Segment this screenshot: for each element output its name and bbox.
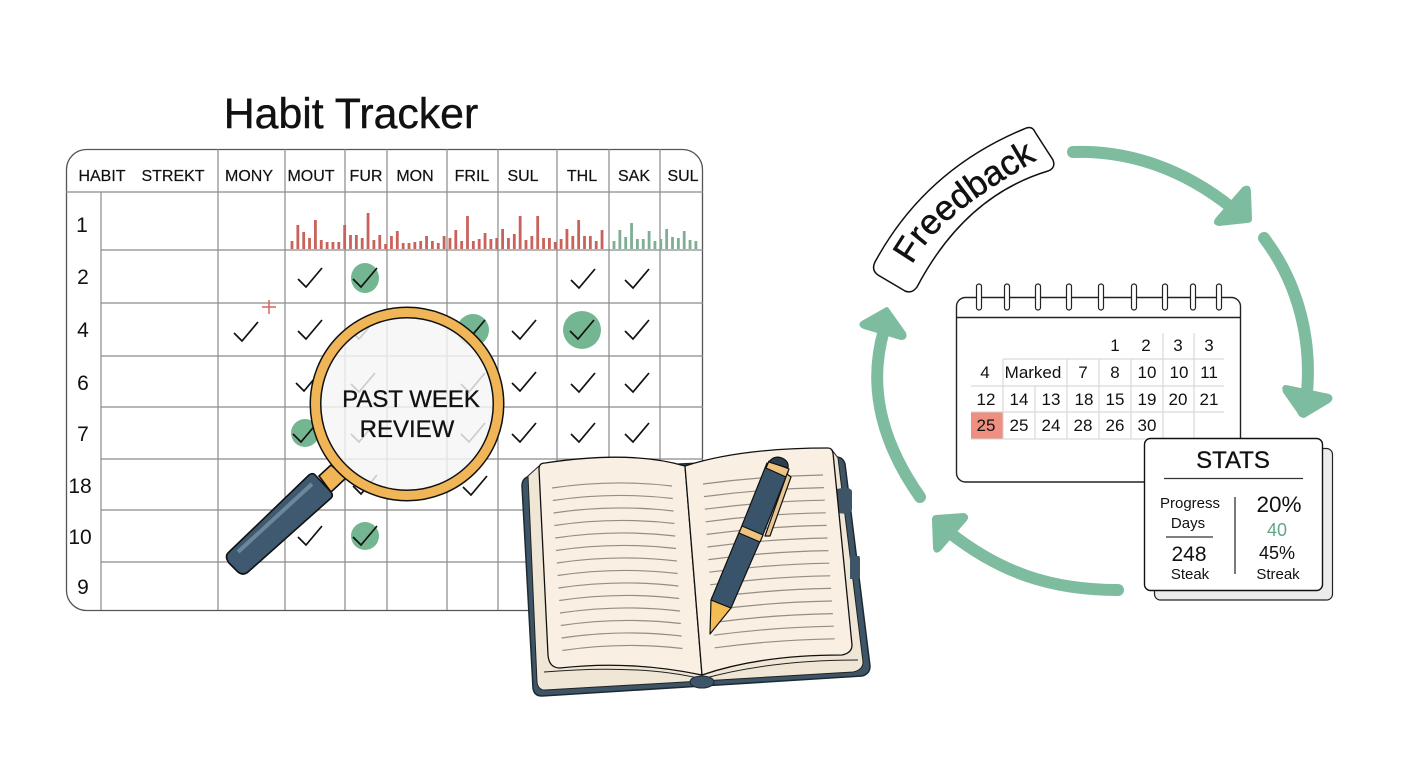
calendar dates: 3 [1173, 336, 1183, 355]
row numbers [68, 214, 92, 599]
calendar dates: 11 [1200, 363, 1218, 382]
front sheet [1144, 438, 1322, 590]
calendar dates: 8 [1110, 363, 1120, 382]
arrow: feedback loop right [1264, 238, 1332, 417]
calendar dates: 4 [980, 363, 990, 382]
column headers: THL [567, 168, 597, 185]
column headers: STREKT [141, 168, 205, 185]
calendar dates: 18 [1075, 390, 1093, 409]
page stack [528, 450, 863, 690]
row numbers: 6 [77, 372, 89, 395]
magnifier neck [319, 465, 346, 492]
calendar dates: 14 [1010, 390, 1028, 409]
right page [685, 448, 852, 675]
calendar dates: 20 [1169, 390, 1187, 409]
cover tabs [837, 488, 852, 514]
column headers: SUL [667, 168, 699, 185]
calendar dates: 10 [1138, 363, 1156, 382]
calendar dates: 28 [1074, 416, 1092, 435]
column headers: SAK [618, 168, 650, 185]
right page lines [703, 475, 835, 648]
calendar dates: 24 [1042, 416, 1060, 435]
panel: stats card [1144, 438, 1332, 600]
calendar dates: 3 [1204, 336, 1214, 355]
binder rings [976, 284, 1222, 310]
right stats column: 40 [1267, 520, 1287, 540]
calendar dates: 13 [1042, 390, 1060, 409]
pen [710, 457, 791, 634]
calendar dates: 26 [1106, 416, 1124, 435]
calendar dates: 21 [1200, 390, 1218, 409]
panel: habit table [66, 149, 703, 610]
table grid [66, 149, 703, 610]
calendar dates: 19 [1138, 390, 1156, 409]
title: Habit Tracker [224, 90, 478, 138]
red plus mark [262, 300, 276, 314]
notebook cover [522, 457, 870, 696]
calendar dates: 10 [1170, 363, 1188, 382]
lens rim [316, 312, 498, 496]
row numbers: 18 [68, 475, 92, 498]
calendar dates: Marked [1005, 363, 1061, 382]
calendar body [956, 298, 1240, 482]
calendar grid [971, 333, 1224, 439]
lens label: PAST WEEK [342, 386, 480, 413]
icon: magnifying glass [226, 312, 498, 574]
calendar dates: 25 [1010, 416, 1028, 435]
right stats column: Streak [1256, 566, 1300, 583]
column headers [78, 168, 699, 185]
callout: Freedback banner [872, 126, 1055, 293]
calendar dates: 12 [977, 390, 995, 409]
row numbers: 1 [76, 214, 88, 237]
stats dividers [1164, 478, 1303, 574]
left stats column: Days [1171, 515, 1205, 532]
left page [539, 457, 702, 675]
stats heading: STATS [1196, 447, 1270, 474]
column headers: MONY [225, 168, 273, 185]
row numbers: 10 [68, 526, 92, 549]
arrow: feedback loop top right [1073, 152, 1251, 225]
left page lines [552, 483, 682, 650]
magnifier handle [226, 474, 332, 574]
row numbers: 4 [77, 319, 89, 342]
row numbers: 9 [77, 576, 89, 599]
lens [317, 314, 497, 494]
calendar dates [977, 336, 1218, 435]
green completed circles [291, 263, 601, 550]
lens label: REVIEW [360, 416, 455, 443]
arrow: feedback loop left [860, 308, 920, 497]
column headers: HABIT [78, 168, 126, 185]
column headers: MOUT [287, 168, 335, 185]
calendar dates: 25 [977, 416, 995, 435]
row numbers: 2 [77, 266, 89, 289]
column headers: MON [396, 168, 434, 185]
icon: open notebook [522, 448, 870, 696]
table frame [66, 150, 702, 610]
right stats column: 45% [1259, 543, 1295, 563]
left stats column: 248 [1171, 543, 1207, 566]
calendar dates: 15 [1106, 390, 1124, 409]
red bar sparkline [292, 213, 602, 249]
right stats column [1256, 492, 1302, 583]
column headers: FRIL [455, 168, 489, 185]
highlighted date cell [971, 412, 1003, 439]
spine clasp [690, 676, 714, 688]
calendar dates: 1 [1110, 336, 1120, 355]
arrow: feedback loop bottom [933, 514, 1118, 590]
right stats column: 20% [1256, 492, 1302, 517]
left stats column [1160, 495, 1220, 583]
column headers: FUR [350, 168, 382, 185]
callout: Freedback banner: Freedback [892, 144, 1038, 263]
left stats column: Steak [1171, 566, 1210, 583]
panel: calendar [956, 284, 1241, 482]
green bar sparkline [614, 223, 696, 249]
calendar dates: 2 [1141, 336, 1151, 355]
column headers: SUL [507, 168, 539, 185]
check marks [234, 268, 649, 545]
calendar dates: 7 [1078, 363, 1088, 382]
row numbers: 7 [77, 423, 89, 446]
back sheet [1154, 448, 1332, 600]
handle highlight [238, 484, 312, 552]
left stats column: Progress [1160, 495, 1220, 512]
calendar dates: 30 [1138, 416, 1156, 435]
